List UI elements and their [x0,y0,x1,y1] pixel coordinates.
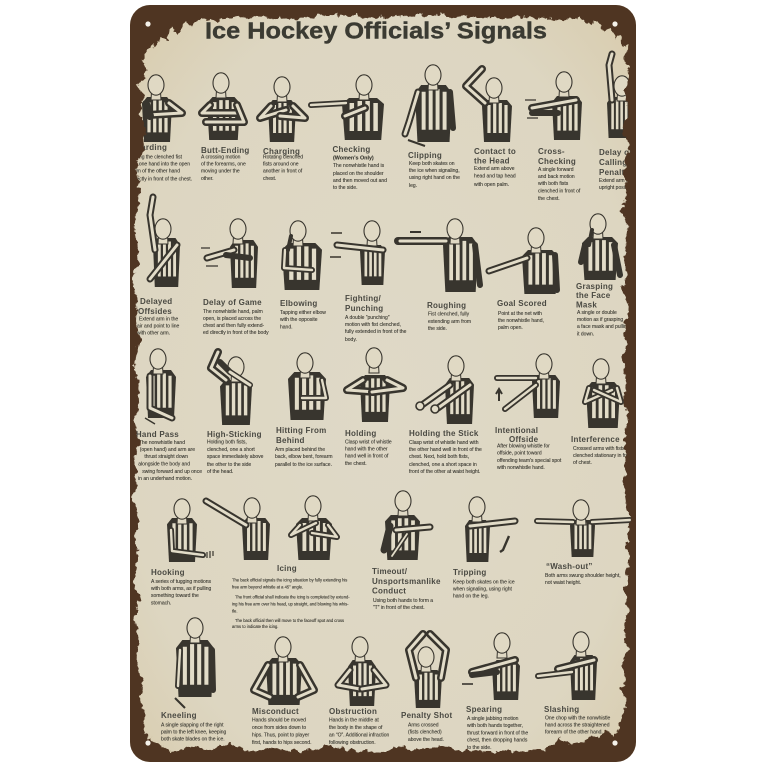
heading: Goal Scored: Goal Scored [497,299,547,308]
signal: Delay of Game [201,219,269,336]
heading: Hand Pass: Hand Pass [136,430,179,439]
caption: Icing: tle. [232,608,237,614]
signal: Slashing [538,632,611,736]
signal: Spearing [462,633,528,751]
heading: Slashing: Slashing [544,705,579,714]
caption: Fighting/Punching: body. [345,337,357,343]
caption: Clipping: the ice when signaling, [409,168,460,174]
caption: Misconduct: Hands should be moved [252,718,306,724]
signal: Hooking [151,499,213,606]
caption: High-Sticking: Holding both fists, [207,440,247,446]
caption: Delayed Offsides: with other arm. [137,330,170,336]
mounting hole: top left [145,21,151,27]
caption: Intentional Offside: offside, point toward [497,450,542,456]
heading: Checking: Checking [332,145,371,154]
signal: Fighting/Punching [330,221,407,343]
signal: Contact to the Head [466,69,516,188]
caption: Hand Pass: The nonwhistle hand [139,440,185,446]
caption: Elbowing: Tapping either elbow [280,310,326,316]
signal: Kneeling [161,618,227,742]
caption: Penalty Shot: (fists clenched) [408,730,442,736]
caption: Boarding: Striking the clenched fist [128,154,183,160]
heading: Interference: Interference [571,435,620,444]
caption: Butt-Ending: A crossing motion [201,154,241,160]
caption: Delay of Game: open, is placed across the [203,316,261,322]
caption: Interference: clenched stationary in front [573,453,633,459]
figure: Roughing [398,219,480,292]
caption: Delayed Offsides: Extend arm in the [139,316,178,322]
caption: Intentional Offside: offending team’s special spot [497,458,562,464]
caption: Elbowing: hand. [280,324,293,330]
caption: Hitting From Behind: Arm placed behind the [275,447,325,453]
caption: Misconduct: first, hands to hips second. [252,740,311,746]
signal: Roughing [398,219,480,332]
figure: Slashing [538,632,597,700]
caption: Butt-Ending: other. [201,176,214,182]
signal: Delayed Offsides [137,197,180,336]
heading: Delay of Calling Penalty: Penalty [599,168,630,177]
caption: Misconduct: once from sides down to [252,725,306,731]
heading: Fighting/Punching: Punching [345,304,383,313]
caption: Boarding: palm of the other hand [130,168,180,174]
figure: Cross-Checking [525,72,582,140]
heading: Hooking: Hooking [151,568,185,577]
caption: Butt-Ending: moving under the [201,168,240,174]
caption: High-Sticking: space immediately above [207,454,264,460]
caption: Grasping the Face Mask: a face mask and pulling [577,324,630,330]
caption: Delay of Calling Penalty: Extend arm in [599,178,630,184]
figure: Tripping [465,497,515,562]
caption: Hand Pass: in an underhand motion. [138,476,192,482]
caption: Cross-Checking: and back motion [538,174,575,180]
heading: Hitting From Behind: Behind [276,436,305,445]
caption: Checking: to the side. [333,185,357,191]
figure: Icing back official [206,498,270,560]
signal: Elbowing [280,221,326,330]
caption: Charging: fists around one [263,162,299,168]
caption: Goal Scored: the nonwhistle hand, [498,318,544,324]
caption: Holding the Stick: Clasp wrist of whistle hand with [409,440,479,446]
caption: Holding: hand with the other [345,446,388,452]
caption: Penalty Shot: above the head. [408,737,444,743]
heading: Icing: Icing [277,564,297,573]
signal: Wash-out [537,500,630,586]
caption: Icing: The back official then will move to the faceoff spot and cross [235,618,344,623]
caption: Contact to the Head: head and tap head [474,174,516,180]
heading: Penalty Shot: Penalty Shot [401,711,453,720]
heading: Grasping the Face Mask: Mask [576,300,597,310]
heading: Contact to the Head: Contact to [474,147,516,156]
caption: Hitting From Behind: parallel to the ice surface. [275,462,332,468]
caption: Clipping: Keep both skates on [409,161,455,167]
figure: Contact to the Head [466,69,512,142]
caption: Holding: the chest. [345,461,367,467]
mounting hole: bottom left [145,740,151,746]
caption: Goal Scored: Point at the net with [498,311,542,317]
figure: Fighting/Punching [330,221,385,285]
figure: Hitting From Behind [288,353,326,420]
parchment background [130,5,636,762]
figure: Hand Pass [145,349,176,424]
caption: Hooking: with both arms, as if pulling [151,586,212,592]
figure: Delay of Calling Penalty [607,54,631,138]
caption: Kneeling: both skate blades on the ice. [161,736,225,742]
caption: Icing: The back official signals the icing situation by fully extending his [232,578,347,582]
caption: Spearing: with both hands together, [467,723,523,729]
caption: Misconduct: hips. Thus, point to player [252,732,309,738]
signal: Tripping [453,497,515,600]
figure: Charging [260,77,305,142]
signal: Interference [571,359,633,466]
caption: Boarding: directly in front of the chest. [131,176,192,182]
figure: Misconduct [254,637,314,705]
caption: Clipping: leg. [409,183,417,189]
signal: Timeout/Unsportsmanlike Conduct [372,491,441,611]
signal: Penalty Shot [401,634,453,743]
figure: Goal Scored [489,228,558,294]
caption: Slashing: forearm of the other hand. [545,730,603,736]
caption: Delay of Game: The nonwhistle hand, palm [203,309,263,315]
caption: Spearing: A single jabbing motion [467,716,519,722]
caption: Interference: Crossed arms with fists [573,446,625,452]
caption: Cross-Checking: A single forward [538,167,574,173]
signal: Checking [311,75,387,191]
caption: Spearing: thrust forward in front of the [467,730,528,736]
figure: Icing front official [291,496,337,560]
caption: Grasping the Face Mask: it down. [577,332,594,338]
signal: Hitting From Behind [275,353,333,468]
signal: Holding [345,348,403,467]
caption: Hand Pass: alongside the body and [138,462,190,468]
caption: Roughing: the side. [428,326,447,332]
heading: Timeout/Unsportsmanlike Conduct: Unsportsmanlike [372,577,441,586]
caption: Checking: The nonwhistle hand is [333,163,385,169]
figure: Clipping [405,65,453,146]
figure: Penalty Shot [409,634,446,708]
figure: Grasping the Face Mask [581,214,620,280]
caption: Checking: placed on the shoulder [333,171,384,177]
caption: Tripping: Keep both skates on the ice [453,580,515,586]
caption: Holding the Stick: clenched, one a short space in [409,462,477,468]
caption: Kneeling: A single slapping of the right [161,722,224,728]
heading: High-Sticking: High-Sticking [207,430,262,439]
caption: Hooking: A series of tugging motions [151,579,212,585]
heading: Contact to the Head: the Head [474,156,510,166]
caption: Icing: ing his free arm over his head, up straight, and blowing his whis- [232,602,349,606]
caption: Icing: free arm beyond whistle at a 45° angle. [232,584,303,590]
caption: Clipping: using right hand on the [409,175,460,181]
caption: Obstruction: Hands in the middle at [329,718,379,724]
caption: Delay of Game: chest and then fully extend- [203,323,264,329]
heading: Spearing: Spearing [466,705,502,714]
heading: Obstruction: Obstruction [329,707,377,716]
figure: Holding the Stick [416,356,474,424]
signal: Cross-Checking [525,72,582,202]
heading: Elbowing: Elbowing [280,299,318,308]
figure: Boarding [142,75,182,142]
figure: Holding [347,348,403,422]
caption: Fighting/Punching: fully extended in front of the [345,329,407,335]
figure: Kneeling [175,618,214,708]
heading: Delayed Offsides: Delayed [140,297,172,306]
signal: Butt-Ending [201,73,250,182]
signal: Charging [260,77,305,182]
caption: High-Sticking: clenched, one a short [207,447,255,453]
signal: Hand Pass [136,349,202,482]
caption: Holding the Stick: the other hand well in front of the [409,447,482,453]
caption: Obstruction: an “O”. Additional infraction [329,732,390,738]
mounting hole: bottom right [612,740,618,746]
caption: Intentional Offside: with nonwhistle hand. [497,465,545,471]
signal: Clipping [405,65,460,189]
figure: Delayed Offsides [150,197,180,287]
figure: Spearing [462,633,520,700]
signal: High-Sticking [207,352,264,475]
caption: Holding: hand well in front of [345,454,389,460]
caption: Hand Pass: thrust straight down [144,454,188,460]
signal: Misconduct [252,637,314,746]
caption: Wash-out: Both arms swung shoulder height, [545,573,621,579]
figure: Butt-Ending [202,73,244,140]
caption: Icing: arms to indicate the icing. [232,624,278,629]
figure: Obstruction [338,637,386,706]
caption: Elbowing: with the opposite [280,317,318,323]
signal: Obstruction [329,637,390,746]
caption: Hand Pass: swing forward and up once [142,469,202,475]
caption: Obstruction: the body in the shape of [329,725,383,731]
caption: Obstruction: following obstruction. [329,740,376,746]
heading: Holding the Stick: Holding the Stick [409,429,479,438]
heading: Delay of Game: Delay of Game [203,298,262,307]
figure: Timeout [384,491,430,560]
caption: Grasping the Face Mask: A single or double [577,310,617,316]
caption: Cross-Checking: with both fists [538,181,569,187]
caption: Wash-out: not waist height. [545,580,581,586]
caption: Timeout/Unsportsmanlike Conduct: “T” in front of the chest. [373,605,425,611]
heading: Charging: Charging [263,147,300,156]
figure: Interference [585,359,621,428]
caption: Interference: of chest. [573,460,592,466]
heading: Cross-Checking: Checking [538,157,576,166]
signal: Grasping the Face Mask [576,214,630,338]
caption: Delay of Game: ed directly in front of the body [203,330,269,336]
caption: Hooking: something toward the [151,593,199,599]
caption: Spearing: chest, then dropping hands [467,738,528,744]
caption: Hand Pass: (open hand) and arm are [140,447,195,453]
heading: Holding: Holding [345,429,377,438]
caption: Cross-Checking: clenched in front of [538,188,581,194]
caption: Kneeling: palm to the left knee, keeping [161,730,227,736]
heading: Wash-out: “Wash-out” [546,562,593,571]
caption: Contact to the Head: Extend arm above [474,166,515,172]
subheading: Women's Only: (Women’s Only) [333,156,374,162]
caption: Tripping: hand on the leg. [453,594,489,600]
heading: Clipping: Clipping [408,151,442,160]
mounting hole: top right [612,21,618,27]
caption: Checking: and then moved out and [333,178,387,184]
caption: Spearing: to the side. [467,745,491,751]
caption: Charging: chest. [263,176,276,182]
caption: Contact to the Head: with open palm. [474,182,509,188]
heading: Delay of Calling Penalty: Calling [599,158,627,167]
heading: Grasping the Face Mask: Grasping [576,282,613,291]
heading: Cross-Checking: Cross- [538,147,565,156]
caption: Roughing: extending arm from [428,319,471,325]
signal: Icing [206,496,350,629]
figure: Delay of Game [201,219,258,288]
caption: Slashing: One chop with the nonwhistle [545,716,611,722]
caption: Charging: Rotating clenched [263,154,303,160]
heading: Misconduct: Misconduct [252,707,299,716]
caption: High-Sticking: of the head. [207,469,233,475]
caption: Holding: Clasp wrist of whistle [345,440,392,446]
caption: Boarding: of one hand into the open [133,162,190,168]
caption: Slashing: hand across the straightened [545,722,610,728]
figure: High-Sticking [211,352,252,425]
caption: Hooking: stomach. [151,600,171,606]
rusted torn border [110,0,656,768]
title: Ice Hockey Officials’ Signals [205,18,547,44]
caption: Goal Scored: palm open. [498,325,523,331]
heading: Intentional Offside: Intentional [495,426,538,435]
caption: Holding the Stick: chest. Next, hold both fists, [409,454,469,460]
caption: Hitting From Behind: back, elbow bent, forearm [275,454,333,460]
caption: Cross-Checking: the chest. [538,196,560,202]
heading: Delay of Calling Penalty: Delay of [599,148,632,157]
caption: Timeout/Unsportsmanlike Conduct: Using both hands to form a [373,598,433,604]
figure: Wash-out [537,500,630,557]
heading: Timeout/Unsportsmanlike Conduct: Timeout/ [372,567,408,576]
caption: Icing: The front official shall indicate the icing is completed by extend- [235,594,350,600]
signal: Holding the Stick [409,356,482,475]
caption: Holding the Stick: front of the other at waist height. [409,469,480,475]
caption: Penalty Shot: Arms crossed [408,722,439,728]
heading: Tripping: Tripping [453,568,487,577]
heading: Delayed Offsides: Offsides [138,307,172,316]
heading: Butt-Ending: Butt-Ending [201,146,250,155]
signal: Delay of Calling Penalty [599,54,633,191]
caption: Tripping: when signaling, using right [453,586,513,592]
caption: Grasping the Face Mask: motion as if grasping [577,317,623,323]
figure: Checking [311,75,384,140]
heading: Roughing: Roughing [427,301,466,310]
caption: Delayed Offsides: air and point to line [137,324,179,330]
signal: Goal Scored [489,228,558,331]
signal: Boarding [128,75,192,182]
figure: Hooking [167,499,213,562]
heading: Timeout/Unsportsmanlike Conduct: Conduct [372,586,406,596]
caption: Charging: another in front of [263,168,303,174]
heading: Fighting/Punching: Fighting/ [345,294,382,303]
caption: High-Sticking: the other to the side [207,462,251,468]
caption: Delay of Calling Penalty: upright position [599,185,633,191]
heading: Boarding: Boarding [130,143,167,152]
figure: Intentional Offside [496,354,560,418]
heading: Kneeling: Kneeling [161,711,197,720]
heading: Intentional Offside: Offside [509,435,539,444]
caption: Roughing: Fist clenched, fully [428,312,470,318]
figure: Elbowing [282,221,322,290]
heading: Hitting From Behind: Hitting From [276,426,327,435]
caption: Butt-Ending: of the forearms, one [201,162,246,168]
caption: Fighting/Punching: A double “punching” [345,315,390,321]
caption: Fighting/Punching: motion with fist clenched, [345,322,401,328]
signal: Intentional Offside [495,354,562,471]
caption: Intentional Offside: After blowing whistle for [497,444,550,450]
heading: Grasping the Face Mask: the Face [576,291,611,300]
